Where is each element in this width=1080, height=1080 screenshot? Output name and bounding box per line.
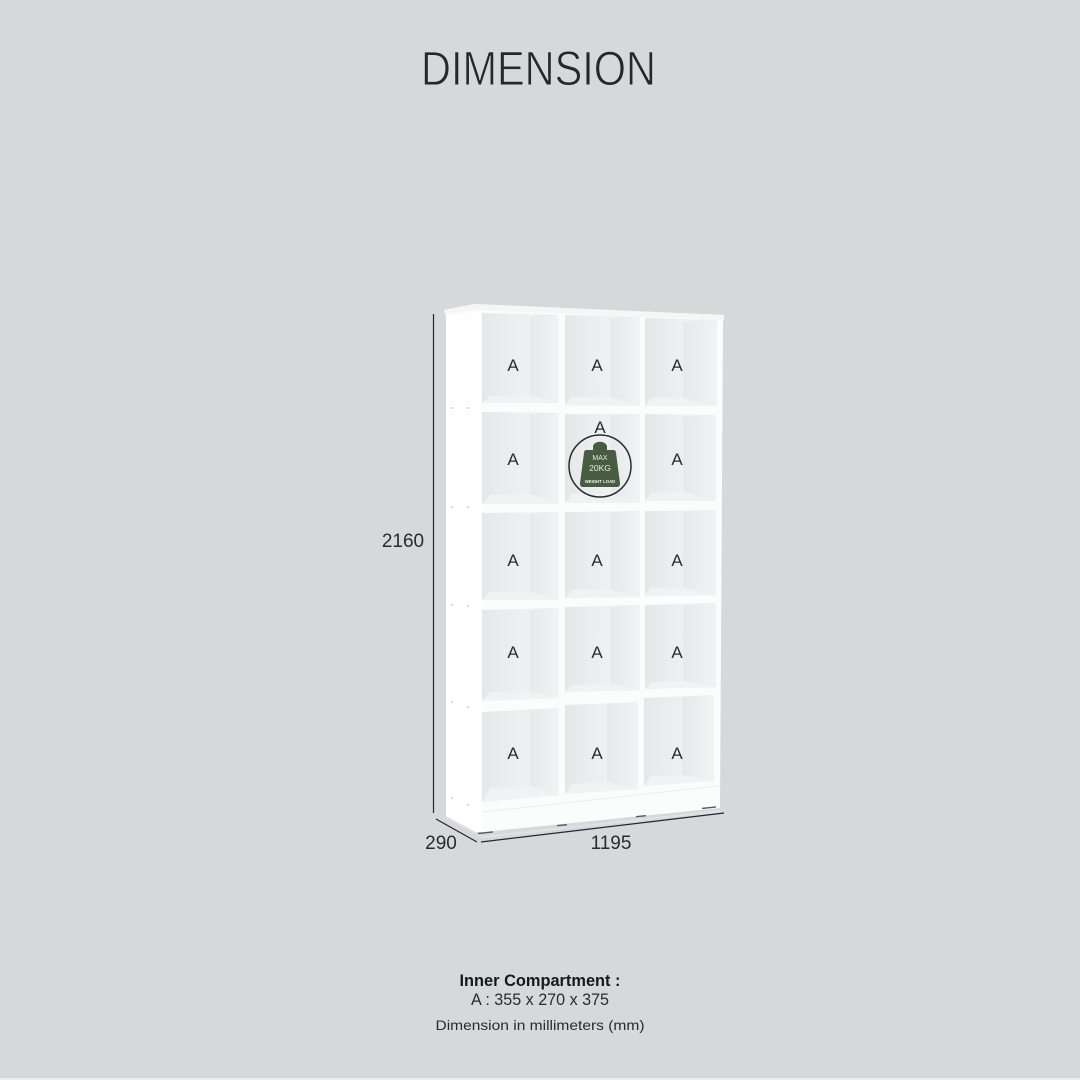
compartment floors [482, 395, 717, 802]
peg holes [451, 407, 469, 806]
compartment labels: A [591, 744, 603, 763]
bookcase [444, 304, 724, 838]
bookcase body [444, 304, 724, 832]
icon: max 20kg weight load badge: WEIGHT LOAD [585, 479, 615, 484]
compartment labels: A [671, 450, 683, 469]
floor shadow [446, 810, 722, 838]
inner compartment note: Dimension in millimeters (mm) [436, 1017, 644, 1033]
bottom edge strip [0, 1078, 1080, 1080]
compartment labels: A [507, 356, 519, 375]
inner compartment note: Inner Compartment : [460, 972, 620, 990]
compartment labels: A [671, 551, 683, 570]
base plinth edge [483, 786, 718, 812]
title: DIMENSION [421, 43, 656, 96]
height label: 2160 [382, 531, 424, 552]
compartment labels: A [591, 551, 603, 570]
compartment labels: A [507, 551, 519, 570]
compartment labels: A [671, 356, 683, 375]
compartment labels: A [507, 643, 519, 662]
width label: 1195 [591, 833, 631, 854]
icon: max 20kg weight load badge [569, 435, 631, 497]
compartment labels: A [591, 643, 603, 662]
top edge highlight [444, 304, 724, 320]
depth label: 290 [425, 833, 457, 854]
compartment labels: A [507, 450, 519, 469]
dimension lines [434, 314, 724, 842]
compartment labels: A [591, 356, 603, 375]
compartment labels: A [671, 643, 683, 662]
feet marks [478, 806, 716, 834]
icon: max 20kg weight load badge: 20KG [589, 463, 611, 473]
inner compartment note: A : 355 x 270 x 375 [471, 991, 609, 1009]
icon: weight shape [580, 442, 620, 487]
side panel [446, 312, 482, 832]
inner compartment note [436, 972, 644, 1033]
compartments [482, 313, 717, 802]
compartment labels: A [594, 418, 606, 437]
compartment labels: A [671, 744, 683, 763]
compartment labels [507, 356, 683, 763]
compartment labels: A [507, 744, 519, 763]
icon: max 20kg weight load badge: MAX [592, 455, 608, 462]
